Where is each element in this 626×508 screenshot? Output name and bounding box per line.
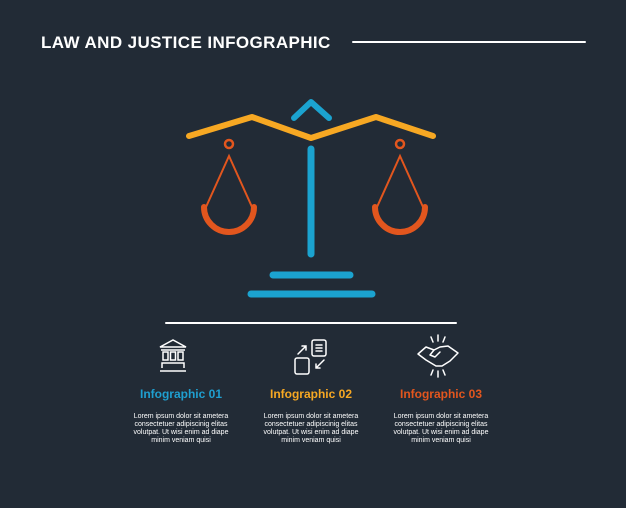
icon: documents exchange xyxy=(294,339,327,375)
icon: handshake xyxy=(417,334,459,378)
column 3 xyxy=(394,387,488,444)
column 1: Infographic 01 xyxy=(140,387,222,401)
column 1 xyxy=(134,387,228,444)
title: LAW AND JUSTICE INFOGRAPHIC xyxy=(41,33,331,52)
column 2: Lorem ipsum dolor sit ametera consectetuer adipiscinig elitas volutpat. Ut wisi enim ad diape minim veniam quisi xyxy=(264,413,358,444)
column 3: Infographic 03 xyxy=(400,387,482,401)
icon: courthouse xyxy=(160,339,186,372)
column 2 xyxy=(264,387,358,444)
column 1: Lorem ipsum dolor sit ametera consectetuer adipiscinig elitas volutpat. Ut wisi enim ad diape minim veniam quisi xyxy=(134,413,228,444)
column 2: Infographic 02 xyxy=(270,387,352,401)
column 3: Lorem ipsum dolor sit ametera consectetuer adipiscinig elitas volutpat. Ut wisi enim ad diape minim veniam quisi xyxy=(394,413,488,444)
